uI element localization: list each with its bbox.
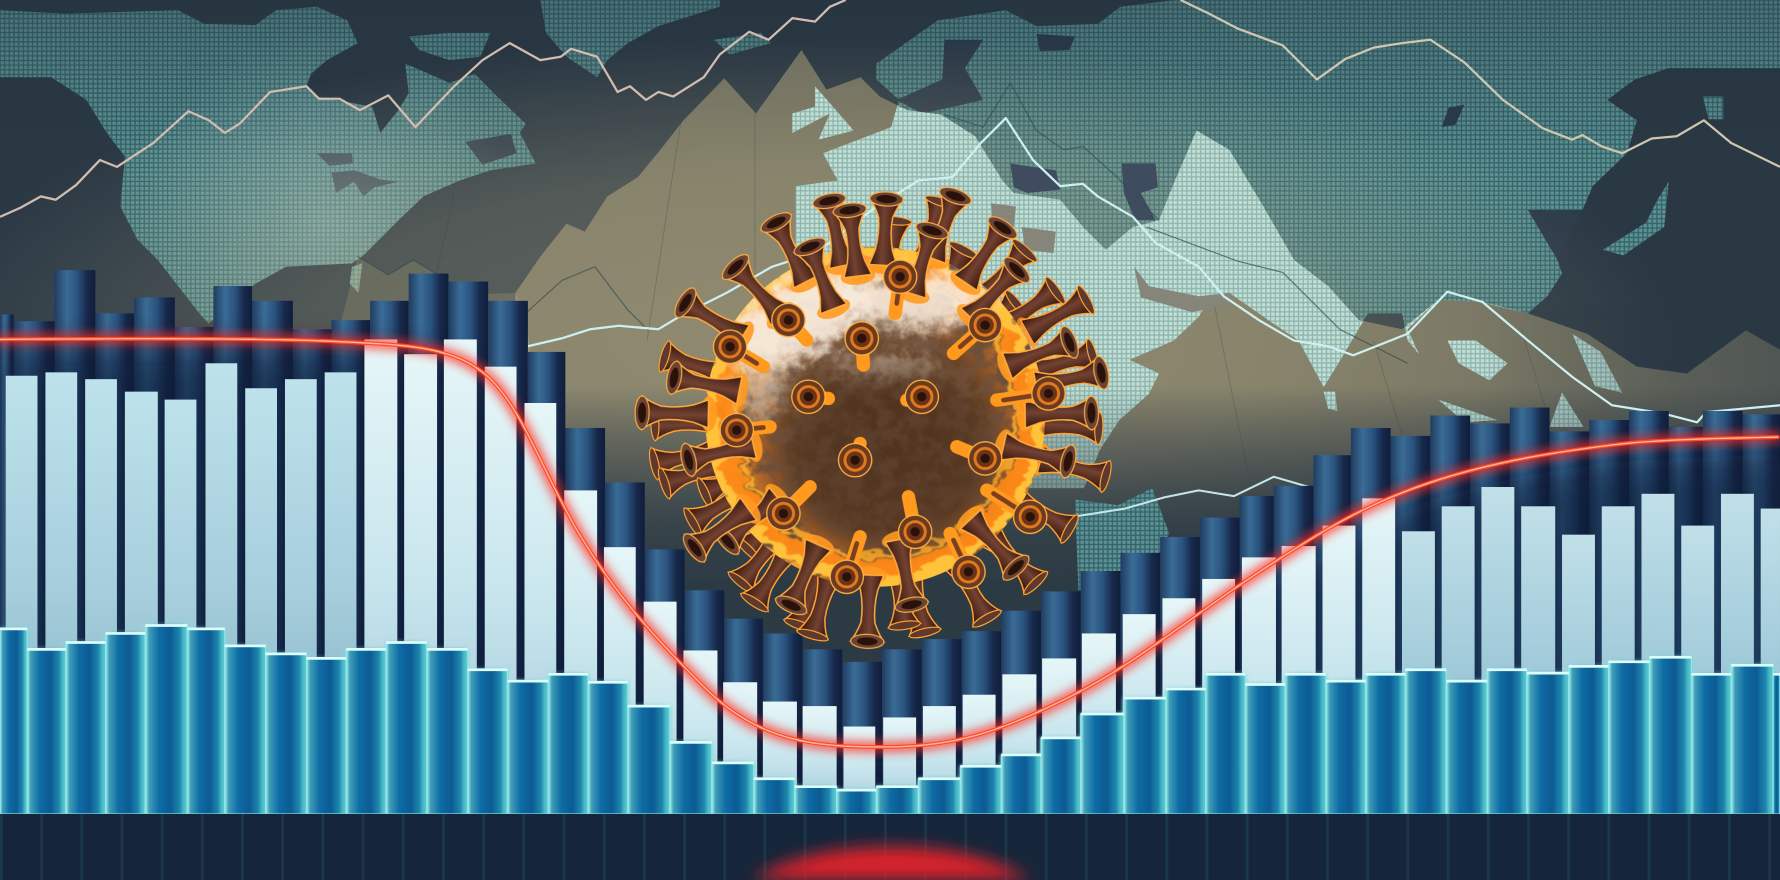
line charts over the map	[0, 0, 1780, 517]
light land inside area overlay	[792, 86, 1622, 488]
map land: continents with dot grid	[0, 0, 1780, 488]
lower Africa dotted land	[1075, 488, 1169, 590]
second tan band under North America	[341, 257, 534, 375]
bright rims on front bar tops	[0, 625, 1780, 790]
dim right side of the map	[1476, 307, 1780, 499]
bar chart: pale middle bars	[6, 339, 1780, 814]
back layer spikes	[647, 193, 1114, 643]
reflective floor	[0, 814, 1780, 880]
bar chart: dark back bars	[0, 270, 1780, 814]
bar chart: glowing blue front bars	[0, 625, 1780, 814]
red reflection glow on floor	[752, 847, 1031, 880]
inland seas	[1010, 163, 1158, 220]
glowing stalks of front-facing spikes	[730, 277, 1048, 577]
faint dark mountain lines	[358, 83, 1408, 363]
coronavirus particle	[635, 184, 1114, 649]
line chart: upper right	[1181, 0, 1780, 167]
warm mountain area overlay	[515, 50, 1780, 880]
line chart: upper left	[0, 0, 846, 217]
virus sphere body	[705, 245, 1045, 587]
warm light glow on the map	[0, 0, 1780, 681]
rim spikes in front of the sphere	[635, 184, 1111, 649]
front-facing spike heads	[713, 259, 1066, 594]
dark shading of back bars below the trend line	[0, 350, 1780, 814]
lighter lit part of North America	[0, 0, 1780, 488]
map dark seas and lakes	[317, 34, 1582, 260]
world map background	[0, 0, 1780, 662]
thin grid lines on the map	[422, 114, 1567, 477]
mediterranean and gulf patches	[991, 203, 1232, 312]
red trend line	[0, 339, 1778, 747]
line chart: middle	[528, 118, 1780, 422]
line chart: lower right	[1075, 477, 1309, 517]
